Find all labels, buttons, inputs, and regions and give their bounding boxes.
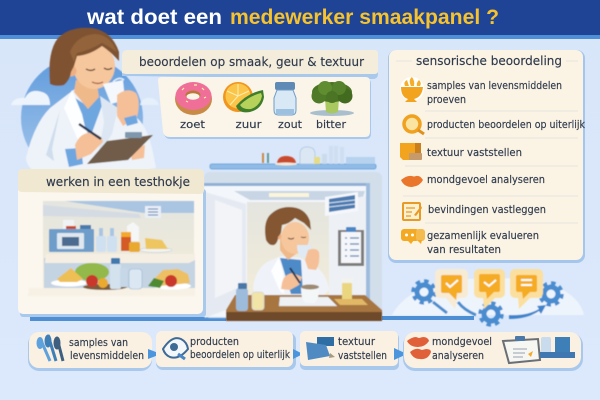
illustration: gears and feedback bbox=[392, 269, 584, 325]
arrow bbox=[148, 349, 161, 359]
label: zoet: zoet bbox=[180, 118, 206, 131]
title text: wat doet een bbox=[86, 6, 222, 29]
heading: taste panel bbox=[122, 50, 378, 79]
label: textuur bbox=[338, 335, 375, 348]
label bbox=[432, 335, 492, 362]
label: levensmiddelen bbox=[70, 349, 144, 362]
label: zuur: zuur bbox=[236, 118, 262, 131]
microwave bbox=[49, 220, 94, 252]
speech bubble: check 1 bbox=[435, 269, 468, 309]
hair bbox=[49, 28, 119, 86]
title banner bbox=[0, 0, 600, 39]
illustration: taster with clipboard bbox=[11, 28, 159, 179]
process step 4: mouthfeel bbox=[403, 332, 583, 371]
coat bbox=[26, 88, 156, 174]
label: producten bbox=[190, 335, 239, 348]
jars bbox=[121, 222, 140, 252]
label bbox=[190, 335, 291, 361]
arrow bbox=[293, 349, 303, 359]
sample paper and hand bbox=[103, 80, 125, 104]
writing hand bbox=[75, 133, 103, 160]
panel: test booth heading and shelves bbox=[18, 169, 206, 317]
text: mouthfeel: mondgevoel analyseren bbox=[427, 173, 545, 186]
hand under clipboard bbox=[130, 145, 145, 160]
icon: clipboard and jar bbox=[503, 336, 575, 363]
panel: taste examples bbox=[158, 77, 371, 139]
text: findings: bevindingen vastleggen bbox=[428, 203, 546, 216]
text: samples: samples van levensmiddelen bbox=[427, 79, 562, 92]
icon: broccoli bbox=[310, 81, 354, 116]
text: evaluation bbox=[427, 229, 539, 256]
text: evaluation: gezamenlijk evalueren bbox=[427, 229, 539, 242]
icon: spoons bbox=[36, 334, 63, 361]
booth heading bbox=[18, 169, 204, 194]
heading: taste panel: beoordelen op smaak, geur & textuur bbox=[139, 54, 365, 69]
tester figure bbox=[253, 207, 329, 296]
process step 2: appearance bbox=[156, 331, 296, 370]
title text: medewerker smaakpanel ? bbox=[230, 6, 499, 29]
icon: salt shaker bbox=[274, 82, 296, 115]
label: analyseren bbox=[432, 349, 484, 362]
label: bitter: bitter bbox=[316, 118, 346, 131]
bottles bbox=[96, 228, 117, 252]
table bbox=[226, 295, 382, 321]
icon: lips bbox=[407, 337, 431, 359]
icon: chat bubbles bbox=[401, 229, 425, 244]
label bbox=[69, 336, 144, 362]
icon: wall checklist bbox=[338, 227, 364, 266]
shelf with lab items bbox=[210, 146, 376, 169]
clipboard bbox=[87, 135, 153, 164]
label: zout: zout bbox=[278, 118, 303, 131]
blue base line bbox=[30, 316, 474, 321]
label: mondgevoel bbox=[432, 335, 492, 348]
neck bbox=[74, 80, 99, 109]
icon: lips bbox=[401, 176, 423, 187]
panel heading: sensorische beoordeling bbox=[416, 53, 562, 68]
label: beoordelen op uiterlijk bbox=[190, 348, 291, 361]
text: texture: textuur vaststellen bbox=[427, 146, 522, 159]
icon: texture blocks bbox=[400, 143, 422, 160]
text: samples: proeven bbox=[427, 93, 466, 106]
speech bubble: lines bbox=[510, 269, 543, 309]
icon: wall vent bbox=[325, 192, 358, 216]
icon: citrus bbox=[223, 82, 264, 112]
icon: texture tool bbox=[306, 337, 335, 360]
icon: donut bbox=[175, 82, 212, 115]
icon: magnifier bbox=[404, 116, 424, 134]
process step 1: samples bbox=[28, 332, 152, 371]
label bbox=[338, 335, 387, 362]
cheese plate bbox=[140, 238, 172, 252]
speech bubble: check 2 bbox=[474, 269, 505, 309]
shelf scene bbox=[28, 201, 195, 296]
icon: tasting bowl bbox=[400, 77, 424, 102]
text: samples bbox=[427, 79, 562, 106]
label: vaststellen bbox=[338, 349, 387, 362]
arrow bbox=[394, 348, 407, 360]
label: samples van bbox=[69, 336, 128, 349]
icon: notepad bbox=[403, 203, 422, 220]
table items bbox=[236, 278, 368, 311]
panel: test booth heading and shelves: werken in een testhokje bbox=[46, 174, 190, 189]
face bbox=[73, 43, 115, 89]
booth: tester at table bbox=[204, 172, 382, 321]
panel: sensory assessment bbox=[388, 50, 586, 263]
process step 3: texture bbox=[300, 331, 399, 370]
text: evaluation: van resultaten bbox=[427, 243, 501, 256]
lower shelf plates bbox=[51, 258, 191, 290]
icon: eye magnifier bbox=[163, 338, 188, 359]
